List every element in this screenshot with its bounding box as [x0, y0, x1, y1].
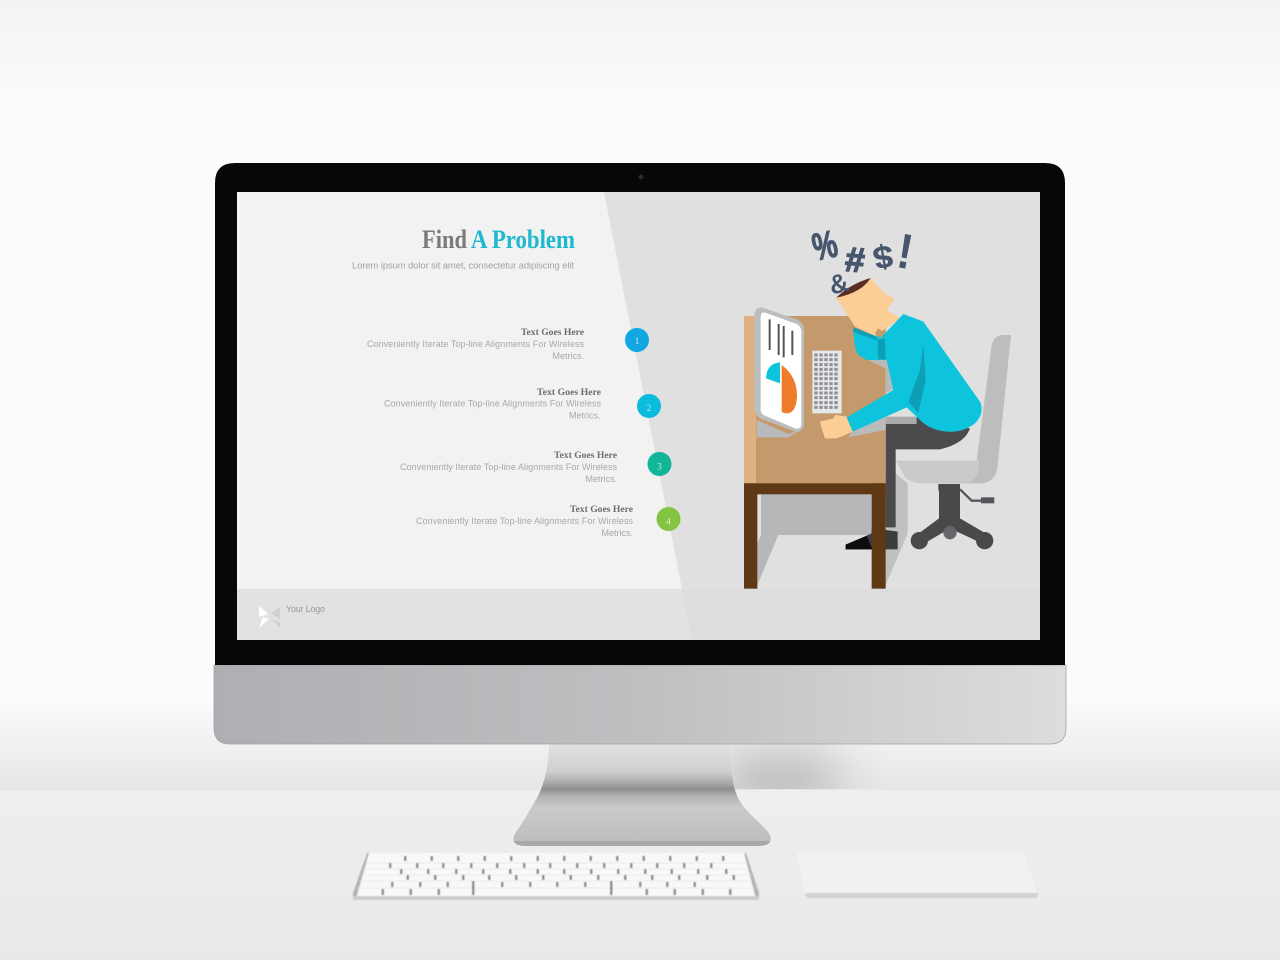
pants	[886, 417, 970, 527]
list item 3: Metrics.	[586, 474, 617, 484]
list item 3: Conveniently Iterate Top-line Alignments For Wireless	[400, 462, 618, 472]
grey shadows on desk	[868, 360, 893, 393]
list item 2	[384, 387, 661, 420]
monitor stand	[513, 744, 771, 846]
under-desk shadow	[757, 494, 872, 585]
list item 1: Conveniently Iterate Top-line Alignments For Wireless	[367, 339, 584, 349]
list item 1: Metrics.	[552, 351, 584, 361]
slide subtitle: Lorem ipsum dolor sit amet, consectetur adipiscing elit	[352, 260, 574, 272]
background: wall and desk surface	[0, 744, 1280, 960]
list item 4: Metrics.	[602, 528, 633, 538]
logo mark	[259, 606, 280, 628]
keyboard	[353, 853, 759, 900]
shirt	[847, 314, 982, 432]
chair lever	[960, 489, 983, 501]
hand	[820, 415, 853, 438]
keypad	[812, 351, 842, 413]
monitor chin	[214, 665, 1066, 744]
list item 1: Text Goes Here	[521, 327, 584, 337]
monitor on desk	[754, 307, 804, 432]
list item 2: 2	[647, 403, 651, 413]
chair	[896, 335, 1011, 549]
open skull	[836, 278, 871, 298]
desk frame	[744, 483, 886, 589]
monitor	[214, 163, 1066, 744]
list item 4: Conveniently Iterate Top-line Alignments For Wireless	[416, 516, 634, 526]
symbols above head: !	[893, 223, 917, 280]
head	[836, 278, 900, 336]
desk	[744, 316, 886, 484]
floor shadow of leg	[886, 473, 908, 585]
list item 3: 3	[657, 462, 662, 472]
list item 4	[416, 504, 680, 538]
trackpad	[797, 852, 1038, 898]
symbols above head: %	[809, 223, 841, 270]
keyboard key gaps	[382, 856, 735, 895]
list item 3	[400, 450, 672, 484]
camera	[639, 175, 643, 179]
logo text: Your Logo	[286, 604, 325, 614]
tie	[878, 338, 886, 359]
monitor pie chart	[782, 365, 797, 413]
list item 3: Text Goes Here	[554, 450, 617, 460]
list item 1	[367, 327, 649, 361]
shoe	[846, 528, 898, 549]
slanted right panel	[604, 192, 1040, 640]
footer band	[237, 589, 1040, 640]
slide panel	[237, 192, 1040, 640]
list item 4: 4	[666, 518, 671, 528]
symbols above head: &	[826, 267, 852, 301]
list item 2: Conveniently Iterate Top-line Alignments For Wireless	[384, 398, 602, 408]
illustration: frustrated man at desk	[744, 223, 1011, 589]
slide title: A Problem	[471, 225, 575, 254]
slide title	[422, 225, 575, 254]
list item 2: Text Goes Here	[537, 387, 601, 397]
slide title: Find	[422, 225, 467, 254]
collar	[853, 327, 877, 341]
symbols above head: $	[870, 237, 896, 275]
monitor bezel	[215, 163, 1065, 665]
symbols above head: #	[844, 241, 866, 280]
chair base	[917, 484, 987, 545]
list item 4: Text Goes Here	[570, 504, 633, 514]
list item 1: 1	[635, 336, 639, 346]
list item 2: Metrics.	[569, 410, 600, 420]
monitor bars	[770, 319, 792, 357]
symbols above head	[809, 223, 917, 301]
